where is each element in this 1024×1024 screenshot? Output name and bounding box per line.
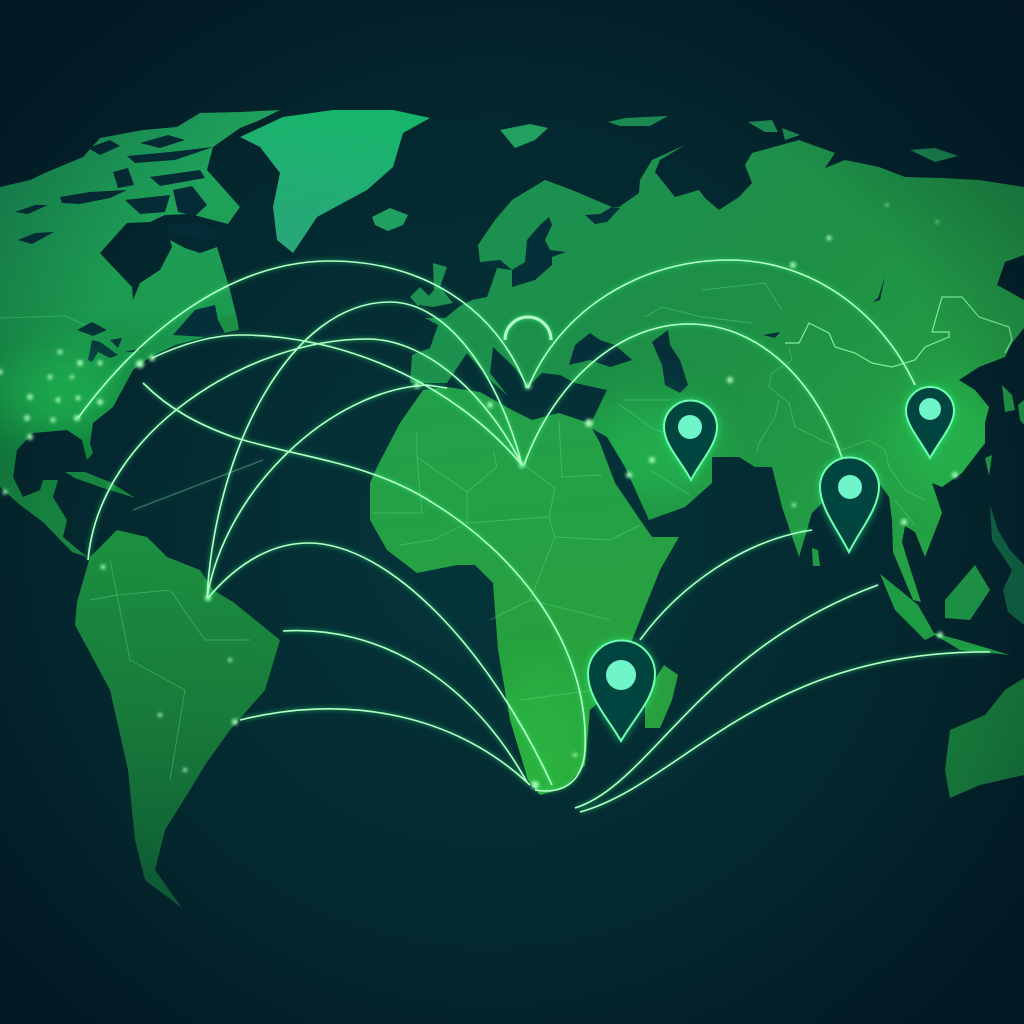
- great lakes: [77, 322, 145, 362]
- arc: brazil to south africa: [208, 543, 552, 785]
- arc: east africa to india: [640, 530, 812, 640]
- canada and usa mainland with arctic archipelago: [0, 110, 280, 557]
- eurasia land glow: [580, 380, 1020, 500]
- iceland: [372, 208, 408, 231]
- arc: brazil coast to south africa: [283, 631, 527, 782]
- arc: brazil to north africa high: [207, 302, 522, 598]
- taiwan and japan: [985, 385, 1024, 476]
- labrador strait: [165, 222, 222, 240]
- arc: faint atlantic line: [133, 460, 263, 510]
- sumatra: [880, 574, 935, 640]
- network arcs: [78, 260, 990, 812]
- arc: balkans to china: [528, 260, 915, 388]
- baltic sea: [480, 217, 566, 287]
- location pin: india: [820, 458, 879, 552]
- city lights: [0, 204, 958, 789]
- arc: us coast to north africa: [152, 335, 522, 465]
- arctic channels: [60, 135, 213, 216]
- location pin: china: [906, 387, 954, 458]
- white sea: [585, 207, 620, 224]
- northern lakes: [15, 205, 54, 244]
- arc: central america to north africa: [88, 339, 522, 560]
- gulf of st lawrence: [173, 305, 225, 337]
- north america: [0, 110, 280, 557]
- africa: [370, 387, 679, 795]
- java: [930, 632, 1010, 655]
- eurasia: [410, 140, 1024, 602]
- svalbard: [500, 124, 548, 148]
- south america: [75, 530, 280, 908]
- russian arctic islands: [608, 116, 958, 162]
- britain: [420, 263, 453, 307]
- arc: north africa to india: [524, 324, 842, 465]
- black sea: [569, 333, 632, 367]
- arc: southern brazil to south africa: [240, 709, 530, 785]
- location pin: east africa: [588, 640, 655, 741]
- borneo: [945, 565, 990, 620]
- arc: eastern us to balkans: [78, 261, 527, 418]
- africa land glow: [522, 694, 558, 760]
- greenland: [240, 110, 430, 253]
- arc: south africa to java: [580, 652, 990, 812]
- ireland: [410, 287, 430, 306]
- bright china outline: [785, 297, 1012, 367]
- arc: us coast to south africa: [143, 383, 585, 791]
- madagascar: [645, 665, 678, 728]
- arc: south africa to indonesia: [575, 585, 878, 808]
- philippines: [990, 505, 1024, 625]
- cuba and caribbean: [65, 472, 135, 498]
- australia: [945, 678, 1024, 798]
- location pin: arabia: [664, 400, 717, 480]
- country borders: [0, 283, 925, 780]
- arc: brazil to spain: [207, 385, 447, 598]
- usa land glow: [0, 353, 125, 437]
- sri lanka: [812, 548, 820, 566]
- newfoundland: [218, 314, 239, 332]
- lake baikal and aral: [763, 277, 885, 338]
- arc: small loop over balkans: [505, 317, 551, 340]
- caspian sea: [652, 330, 688, 393]
